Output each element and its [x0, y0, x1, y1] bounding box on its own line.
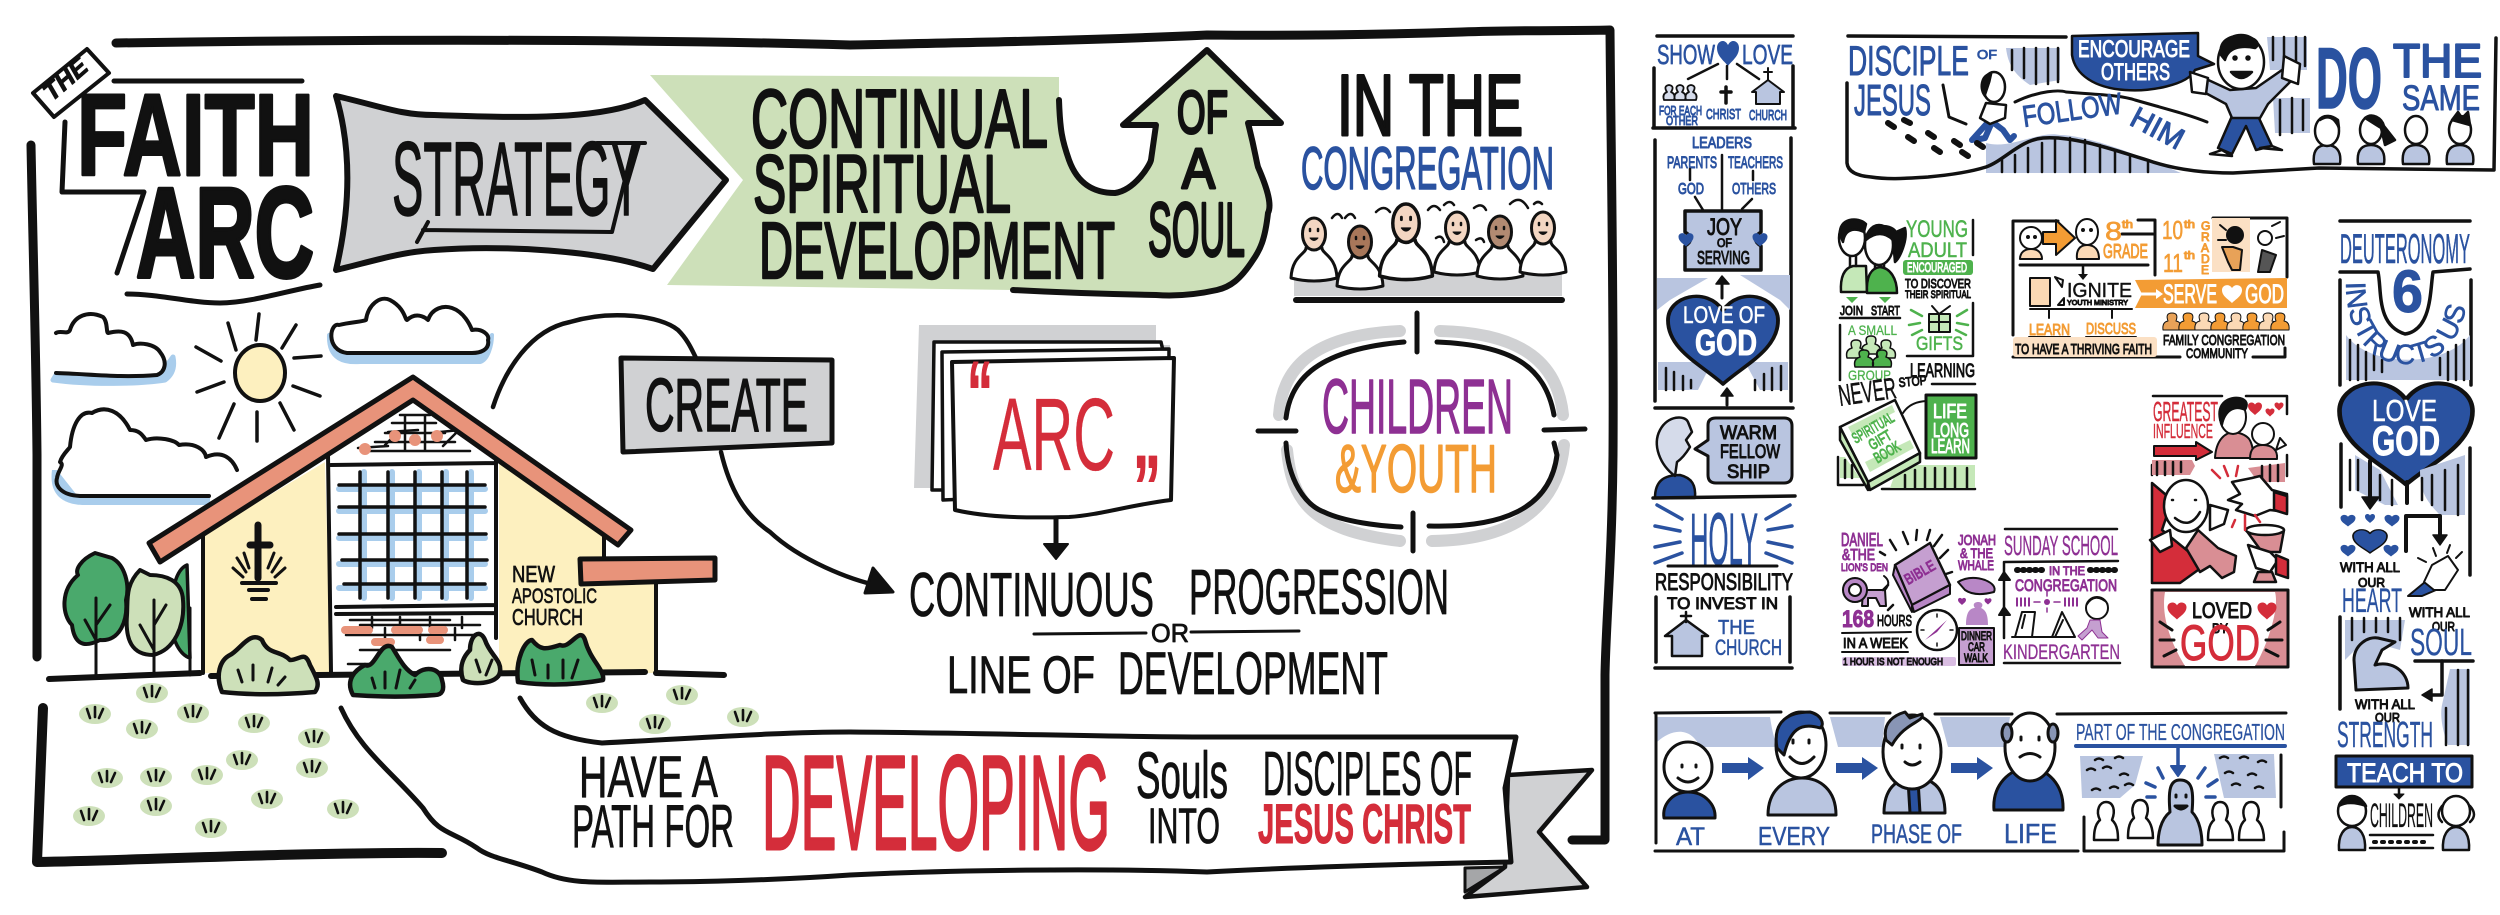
pages: ARC quote card — [914, 325, 1174, 559]
icon: child to teen arrow — [2020, 219, 2099, 259]
tag: encouraged — [1903, 259, 1973, 275]
panel: bible stories and sunday school: IN THE — [2049, 564, 2085, 578]
target: children and youth: CHILDREN — [1322, 364, 1513, 450]
panel: show love to joy of serving: FOR EACH — [1659, 103, 1702, 118]
panel: deuteronomy 6: 6 — [2392, 258, 2423, 325]
panel: ignite youth ministry: E — [2201, 263, 2209, 277]
banner: have a path for developing souls: PATH FOR — [572, 793, 734, 860]
text: disciple of jesus — [1848, 37, 1997, 125]
panel: young adult spiritual gifts: NEVER — [1836, 372, 1898, 413]
text: disciple of jesus: OF — [1977, 47, 1997, 62]
panel: young adult spiritual gifts: START — [1871, 303, 1900, 318]
trees — [64, 553, 190, 675]
panel: young adult spiritual gifts — [1836, 216, 1976, 490]
panel: bible stories and sunday school: LION'S DEN — [1841, 562, 1888, 574]
arrow: Strategy: STRATEGY — [392, 121, 642, 238]
icon: clock — [1917, 610, 1957, 650]
text: of a soul — [1148, 79, 1245, 273]
panel: young adult spiritual gifts: THEIR SPIRITUAL — [1905, 289, 1971, 301]
figure: adult — [1768, 712, 1836, 815]
panel: ignite youth ministry: COMMUNITY — [2186, 345, 2248, 361]
walls — [203, 462, 331, 673]
text: follow him: HIM — [2125, 101, 2190, 156]
text: SUNDAY SCHOOL — [2004, 530, 2118, 561]
speaker: warm fellowship: SHIP — [1727, 462, 1770, 483]
panel: deuteronomy 6: WITH ALL — [2340, 559, 2400, 575]
bushes — [219, 634, 603, 696]
bar: to have a thriving faith: TO HAVE A THRIVING FAITH — [2015, 341, 2152, 358]
speaker: warm fellowship — [1655, 417, 1792, 498]
arrows: routes from heart — [2362, 461, 2447, 551]
box: joy of serving — [1678, 211, 1768, 270]
panel: ignite youth ministry: LEARN — [2029, 322, 2070, 339]
panel: young adult spiritual gifts: STOP — [1898, 373, 1927, 390]
hierarchy: leaders parents teachers: TEACHERS — [1728, 153, 1783, 172]
icon: praising figure — [1958, 598, 1992, 625]
panel: young adult spiritual gifts: A SMALL — [1848, 322, 1897, 338]
text: do the same: SAME — [2402, 79, 2480, 118]
figures: boy and girl — [2338, 796, 2474, 850]
box: life long learn: LIFE — [1933, 401, 1967, 423]
panel: disciple of jesus — [1847, 31, 2496, 179]
panel: bible stories and sunday school: & THE — [1960, 545, 1993, 561]
hierarchy: leaders parents teachers: OTHERS — [1732, 181, 1776, 198]
panel: bible stories and sunday school: HOURS — [1877, 613, 1912, 630]
speech bubble: encourage others — [2072, 33, 2214, 90]
tag: THE — [33, 49, 109, 117]
text: responsibility to invest in the church: THE — [1718, 617, 1755, 639]
text: do the same: THE — [2393, 34, 2482, 87]
box: joy of serving: OF — [1717, 236, 1732, 250]
title: The Faith Arc — [33, 49, 320, 305]
heading: FAITH ARC: ARC — [136, 162, 314, 305]
labels: at every phase of life: EVERY — [1758, 821, 1830, 851]
panel: ignite youth ministry: G — [2201, 219, 2210, 233]
text: continuous progression or line of development — [909, 556, 1449, 707]
heart: love god: GOD — [2372, 417, 2440, 464]
text: follow him — [2020, 87, 2190, 156]
panel: young adult spiritual gifts: LEARNING — [1910, 361, 1975, 382]
text: continuous progression or line of development: DEVELOPMENT — [1118, 640, 1388, 707]
text: continuous progression or line of development: CONTINUOUS — [909, 561, 1154, 630]
hierarchy: leaders parents teachers: GOD — [1678, 181, 1704, 198]
roof — [149, 377, 631, 562]
book: spiritual gift book: SPIRITUAL — [1849, 409, 1897, 447]
panel: ignite youth ministry: th — [2122, 219, 2133, 231]
panel: bible stories and sunday school: JONAH — [1958, 532, 1996, 549]
box: life long learn: LEARN — [1931, 436, 1970, 458]
hearts: with all our heart — [2340, 514, 2400, 556]
text: continual spiritual development: CONTINUAL — [751, 72, 1048, 165]
text: continual spiritual development: DEVELOPMENT — [759, 206, 1115, 295]
panel: ignite youth ministry: FAMILY CONGREGATION — [2163, 332, 2285, 349]
label: create with connector: CREATE — [645, 363, 808, 447]
illustration: congregation crowd — [1291, 200, 1566, 300]
panel: ignite youth ministry: D — [2201, 252, 2210, 266]
icons: family crowd — [2163, 313, 2289, 330]
labels: at every phase of life: AT — [1676, 823, 1705, 851]
box: teach to: TEACH TO — [2347, 758, 2463, 788]
main panel frame — [31, 30, 1613, 862]
bar: to have a thriving faith — [2013, 337, 2157, 358]
text: church name: NEW — [512, 561, 555, 587]
box: life long learn — [1926, 395, 1976, 458]
panel: ignite youth ministry: 8 — [2105, 216, 2122, 246]
panel: ignite youth ministry: 11 — [2163, 248, 2183, 278]
icon: sun and playground — [2012, 590, 2108, 640]
illustration: baby and offering hands — [2150, 476, 2288, 583]
figure: elderly man — [1994, 713, 2063, 810]
target: children and youth: &YOUTH — [1335, 431, 1497, 507]
speech bubble: encourage others: OTHERS — [2101, 59, 2170, 86]
text: church name — [512, 561, 597, 630]
banner: have a path for developing souls: DEVELOPING — [762, 729, 1110, 878]
panel: young adult spiritual gifts: TO DISCOVER — [1905, 276, 1971, 291]
labels: at every phase of life: LIFE — [2004, 818, 2057, 849]
brick work — [345, 415, 480, 664]
banner: have a path for developing souls: HAVE A — [579, 745, 718, 810]
text: follow him: FOLLOW — [2020, 87, 2125, 134]
panel: ignite youth ministry: GRADE — [2103, 241, 2148, 263]
panel: show love to joy of serving: CHURCH — [1749, 107, 1787, 124]
icon: whale — [1958, 578, 1995, 594]
crowd blocks — [2080, 754, 2276, 798]
text: responsibility to invest in the church: RESPONSIBILITY — [1655, 569, 1793, 596]
panel: deuteronomy 6: WITH ALL — [2355, 696, 2415, 712]
pages: ARC quote card: ARC — [993, 377, 1115, 492]
icon: sun — [196, 314, 321, 441]
hierarchy: leaders parents teachers: PARENTS — [1667, 153, 1717, 172]
box: joy of serving: JOY — [1707, 214, 1742, 241]
heart: love of god: GOD — [1695, 322, 1757, 363]
illustration: new apostolic church — [49, 377, 759, 838]
bar: one hour is not enough: 1 HOUR IS NOT ENOUGH — [1843, 657, 1943, 668]
figure: child — [1664, 742, 1715, 818]
panel: young adult spiritual gifts: GIFTS — [1916, 334, 1963, 355]
logo: ignite youth ministry: YOUTH MINISTRY — [2067, 300, 2128, 307]
panel: bible stories and sunday school: KINDERGARTEN — [2003, 641, 2120, 664]
banner: serve god: GOD — [2245, 279, 2284, 309]
icons: four followers — [2314, 112, 2473, 164]
curved text: instructs us: INSTRUCTS US — [2346, 284, 2466, 365]
grass — [73, 683, 759, 838]
heading: holy: HOLY — [1690, 498, 1758, 581]
tag: encouraged: ENCOURAGED — [1907, 259, 1967, 275]
small congregation people — [2094, 800, 2264, 840]
box: joy of serving: SERVING — [1697, 248, 1750, 268]
heading: in the congregation: CONGREGATION — [1301, 135, 1554, 202]
text: continuous progression or line of development: LINE OF — [947, 646, 1095, 705]
panel: young adult spiritual gifts: YOUNG — [1906, 216, 1968, 243]
panel: deuteronomy 6: HEART — [2342, 582, 2402, 620]
panel: ignite youth ministry — [2013, 215, 2289, 361]
text: continual spiritual development — [751, 72, 1115, 295]
panel: deuteronomy 6: OUR — [2432, 619, 2455, 634]
panel: ignite youth ministry: DISCUSS — [2086, 321, 2136, 338]
box: dinner car walk — [1959, 628, 1994, 665]
canopy — [580, 558, 715, 584]
text: continual spiritual development: SPIRITUAL — [753, 139, 1011, 230]
text: disciple of jesus: JESUS — [1854, 76, 1931, 125]
speaker: warm fellowship: FELLOW — [1720, 442, 1780, 463]
labels: at every phase of life — [1676, 818, 2057, 851]
box: loved by god: BY — [2212, 620, 2229, 636]
panel: show love to joy of serving: OTHER — [1666, 113, 1698, 128]
arrows: life phases — [1722, 757, 1993, 780]
heading: FAITH ARC: FAITH — [77, 70, 314, 200]
pages: ARC quote card: ” — [1133, 438, 1161, 538]
icon: two discussing teens — [2212, 218, 2284, 272]
banner: have a path for developing souls: DISCIPLES OF — [1263, 740, 1472, 809]
pages: ARC quote card: “ — [967, 344, 993, 444]
heading: show love — [1657, 39, 1793, 70]
banner: have a path for developing souls — [341, 698, 1592, 897]
heading: FAITH ARC — [77, 70, 314, 305]
logo: ignite youth ministry — [2030, 277, 2132, 307]
heading: in the congregation: IN THE — [1337, 58, 1523, 154]
icon: cross emblem — [233, 525, 285, 599]
book: spiritual gift book: GIFT — [1866, 427, 1895, 454]
box: life long learn: LONG — [1933, 420, 1969, 442]
heading: show love: SHOW — [1657, 39, 1715, 70]
panel: young adult spiritual gifts: JOIN — [1840, 303, 1863, 318]
figure: encouraging man — [2190, 35, 2300, 156]
icon: lion — [1843, 576, 1888, 606]
panel: show love to joy of serving — [1653, 36, 1795, 668]
icon: flexed arm — [2354, 638, 2408, 690]
book: spiritual gift book — [1840, 400, 1920, 490]
text: church name: CHURCH — [512, 604, 583, 630]
heart: love of god: LOVE OF — [1683, 302, 1765, 329]
heading: in the congregation — [1301, 58, 1554, 202]
panel: bible stories and sunday school: WHALE — [1958, 557, 1994, 573]
text: of a soul: OF — [1177, 79, 1228, 146]
text: responsibility to invest in the church — [1655, 569, 1793, 660]
text: do the same: DO — [2316, 31, 2382, 127]
label: create with connector — [493, 315, 893, 593]
box: dinner car walk: WALK — [1964, 651, 1988, 665]
illustration: clouds and sun — [52, 299, 492, 505]
icon: bible — [1880, 530, 1952, 612]
panel: ignite youth ministry: th — [2184, 219, 2195, 231]
window — [339, 472, 487, 598]
text: of a soul: A — [1182, 137, 1215, 201]
panel: greatest influence: INFLUENCE — [2153, 421, 2213, 443]
panel: bible stories and sunday school: &THE — [1842, 547, 1875, 564]
panel: deuteronomy 6 — [2334, 219, 2476, 852]
green arrow: continual spiritual development of a soul: SOUL — [1148, 188, 1245, 273]
heart: love god — [2340, 383, 2472, 484]
panel: bible stories and sunday school: DANIEL — [1841, 530, 1883, 550]
panel: bible stories and sunday school: IN A WEEK — [1843, 635, 1908, 652]
hierarchy: leaders parents teachers: LEADERS — [1692, 135, 1752, 152]
panel: greatest influence — [2150, 396, 2288, 671]
banner: serve god: SERVE — [2163, 279, 2217, 309]
hierarchy: leaders parents teachers — [1667, 135, 1783, 210]
panel: greatest influence: GREATEST — [2153, 396, 2218, 427]
icons: people cross church — [1663, 68, 1784, 104]
text: disciple of jesus: DISCIPLE — [1848, 37, 1969, 84]
banner: have a path for developing souls: JESUS CHRIST — [1258, 792, 1471, 855]
heading: show love: LOVE — [1742, 39, 1793, 70]
figure: middle-aged man — [1883, 712, 1945, 813]
panel: bible stories and sunday school: 168 — [1842, 606, 1874, 633]
arrow: Strategy — [336, 96, 726, 270]
text: responsibility to invest in the church: TO INVEST IN — [1667, 594, 1778, 613]
banner: have a path for developing souls: Souls — [1136, 738, 1228, 812]
panel: ignite youth ministry: A — [2201, 241, 2209, 255]
panel: ignite youth ministry: th — [2184, 250, 2195, 262]
panel: deuteronomy 6: WITH ALL — [2409, 604, 2470, 620]
panel: deuteronomy 6: OUR — [2358, 575, 2385, 590]
heart: love god: LOVE — [2372, 393, 2437, 428]
icon: walking disciple with footprints — [1888, 72, 2014, 156]
icon: gift — [1909, 306, 1968, 335]
panel: young adult spiritual gifts: GROUP — [1848, 367, 1891, 383]
panel: bible stories and sunday school — [1841, 529, 2120, 668]
panel: deuteronomy 6: OUR — [2375, 710, 2400, 725]
panel: ignite youth ministry: 10 — [2162, 215, 2183, 245]
target: children and youth — [1258, 313, 1585, 551]
heading: holy — [1655, 498, 1792, 581]
tag: THE: THE — [38, 52, 95, 107]
heart: love of god — [1668, 296, 1778, 384]
text: church name: APOSTOLIC — [512, 585, 597, 608]
panel: show love to joy of serving: CHRIST — [1706, 106, 1741, 123]
icon: bible: BIBLE — [1902, 557, 1939, 588]
figures: young adults — [1839, 219, 1906, 293]
panel: part of the congregation: PART OF THE CONGREGATION — [2076, 719, 2285, 745]
figure: central person — [2158, 780, 2202, 845]
box: dinner car walk: CAR — [1968, 640, 1985, 654]
panel: bible stories and sunday school: CONGREGATION — [2015, 576, 2117, 595]
panel: part of the congregation — [2057, 713, 2286, 851]
labels: at every phase of life: PHASE OF — [1871, 819, 1962, 849]
green arrow: continual spiritual development of a soul — [650, 50, 1281, 295]
banner: serve god — [2135, 278, 2287, 309]
box: loved by god: GOD — [2180, 615, 2260, 671]
box: dinner car walk: DINNER — [1961, 629, 1992, 643]
banner: have a path for developing souls: INTO — [1148, 798, 1220, 854]
text: responsibility to invest in the church: CHURCH — [1715, 635, 1782, 660]
speech bubble: encourage others: ENCOURAGE — [2078, 36, 2190, 63]
icon: small group — [1847, 336, 1895, 367]
text: continuous progression or line of development: OR — [1151, 618, 1189, 648]
ground line — [49, 672, 724, 679]
panel: at every phase of life — [1655, 712, 2078, 851]
box: loved by god: LOVED — [2192, 598, 2252, 623]
panel: young adult spiritual gifts: ADULT — [1908, 239, 1967, 262]
logo: ignite youth ministry: IGNITE — [2067, 280, 2132, 302]
figures: parent and child — [2215, 398, 2286, 459]
box: loved by god — [2152, 590, 2288, 671]
panel: ignite youth ministry: R — [2201, 230, 2210, 244]
speaker: warm fellowship: WARM — [1720, 423, 1777, 444]
book: spiritual gift book: BOOK — [1871, 438, 1904, 467]
icon: praying hands — [2408, 545, 2462, 596]
ribbon tail — [1465, 770, 1592, 897]
text: continuous progression or line of development: PROGRESSION — [1189, 556, 1449, 628]
